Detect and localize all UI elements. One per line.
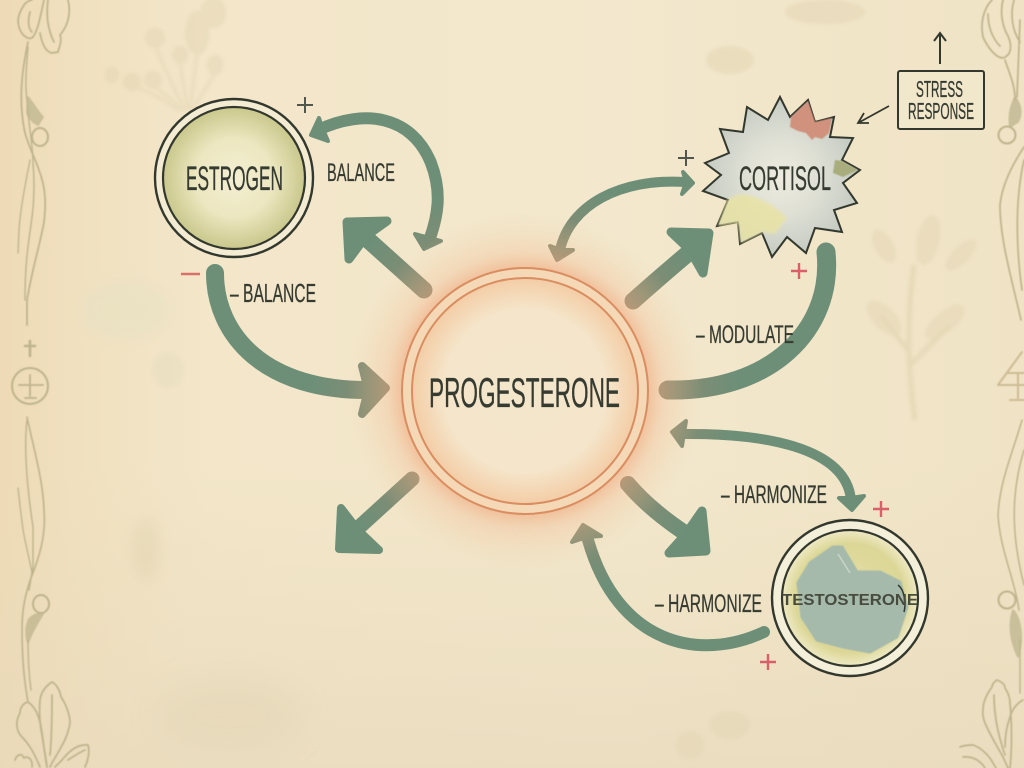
sign: minus estrogen xyxy=(181,273,200,275)
sign: plus cortisol red xyxy=(791,263,807,279)
left vine border xyxy=(12,0,89,767)
label: estrogen: ESTROGEN xyxy=(186,160,283,198)
arrow: progesterone to estrogen xyxy=(347,221,424,290)
node: testosterone xyxy=(772,520,928,676)
label: harmonize lower: – HARMONIZE xyxy=(655,590,762,618)
colour patch: olive xyxy=(833,160,858,177)
rock shape xyxy=(798,547,907,652)
arrow: progesterone to cortisol xyxy=(633,232,709,301)
stress response box xyxy=(898,71,984,129)
right vine border xyxy=(960,0,1024,768)
sign: plus testosterone lower xyxy=(760,654,776,670)
arrow: estrogen balance to progesterone xyxy=(215,273,386,414)
orange glow xyxy=(347,213,703,569)
colour patch: red xyxy=(790,101,832,140)
label: balance upper: BALANCE xyxy=(327,159,395,187)
arrow: double curved progesterone cortisol loop xyxy=(550,172,693,260)
arrow: stress up xyxy=(934,33,946,64)
label: progesterone: PROGESTERONE xyxy=(429,369,620,416)
arrow: double curved estrogen balance loop xyxy=(311,118,441,249)
colour patch: yellow xyxy=(718,195,787,243)
node: cortisol xyxy=(703,97,860,257)
arrow: progesterone to testosterone xyxy=(628,484,706,553)
label: modulate: – MODULATE xyxy=(696,321,794,349)
arrow: double curved progesterone testosterone loop xyxy=(672,421,864,510)
arrow: stress to cortisol xyxy=(858,106,889,123)
node: progesterone xyxy=(347,213,703,569)
sign: plus testosterone upper xyxy=(873,501,889,517)
arrow: testosterone harmonize to progesterone xyxy=(572,525,764,645)
node: estrogen xyxy=(155,99,313,257)
label: cortisol: CORTISOL xyxy=(739,160,831,198)
label: balance lower: – BALANCE xyxy=(230,278,316,308)
arrow: progesterone to lower left xyxy=(339,479,412,550)
sign: plus cortisol xyxy=(678,150,694,166)
label: stress: STRESS xyxy=(916,76,963,102)
sign: plus estrogen xyxy=(297,97,313,113)
arrow: cortisol modulate to progesterone xyxy=(668,252,827,390)
label: harmonize upper: – HARMONIZE xyxy=(721,481,827,509)
label: testosterone: TESTOSTERONE xyxy=(782,592,918,609)
